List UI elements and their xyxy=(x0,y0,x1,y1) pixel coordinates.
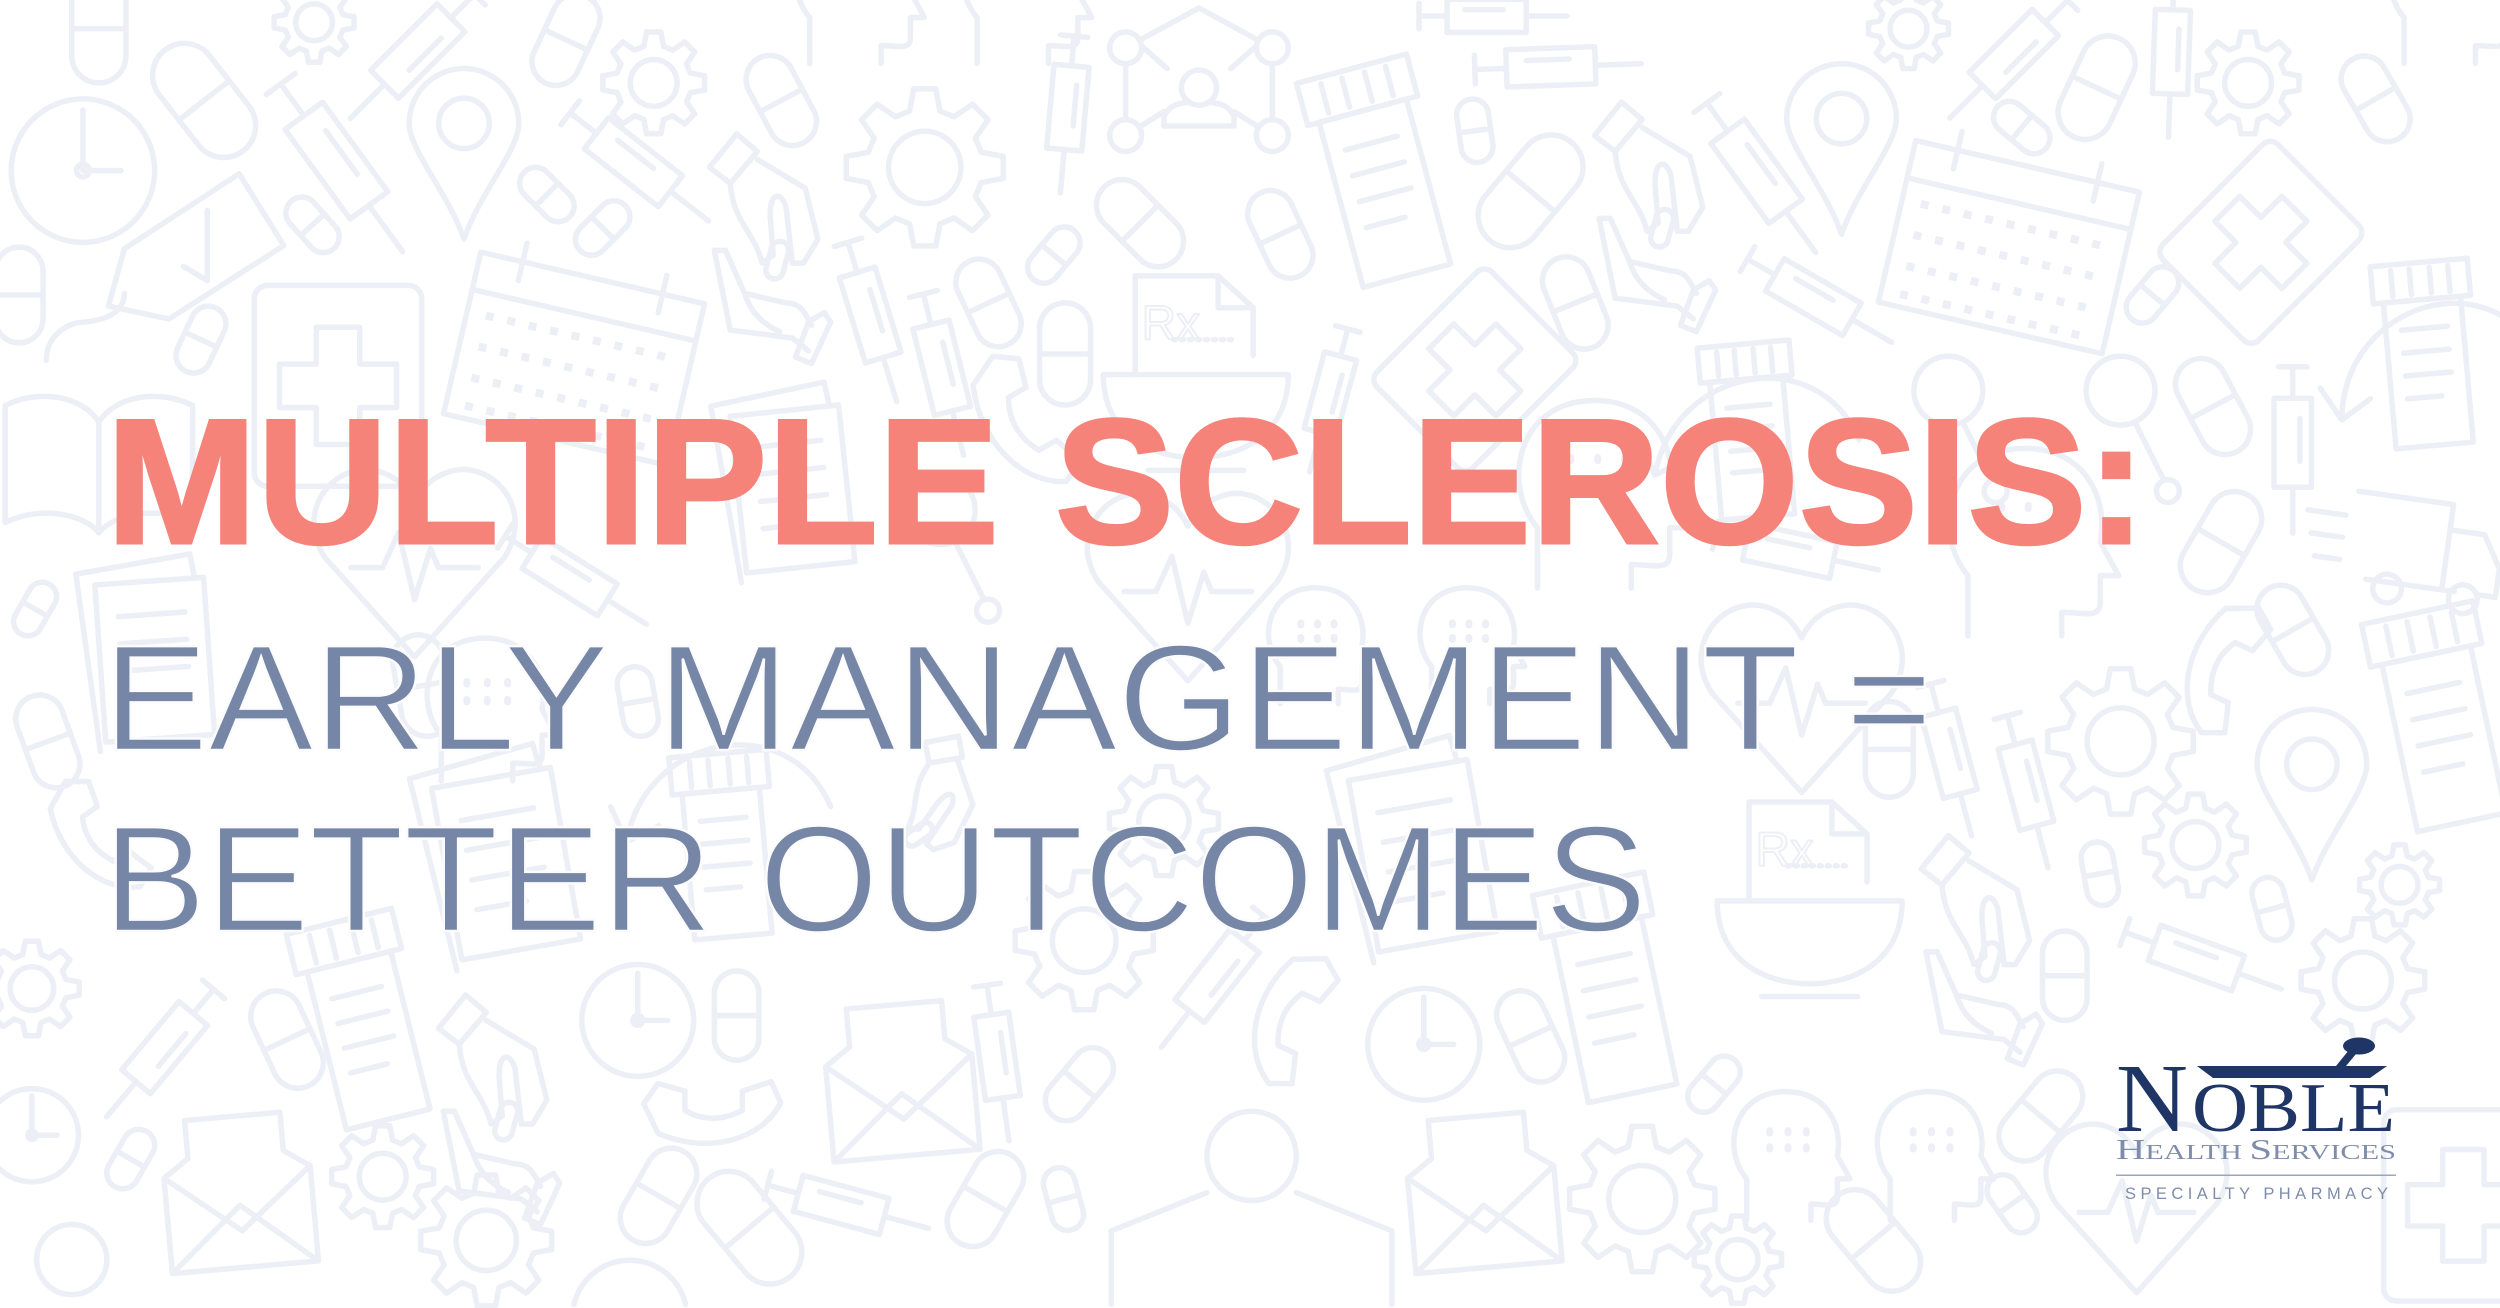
subtitle: Early Management = Better Outcomes: = xyxy=(1846,613,1932,782)
title: Multiple Sclerosis xyxy=(106,382,2146,581)
title: Multiple Sclerosis: MULTIPLE xyxy=(106,382,999,581)
bottom band xyxy=(0,941,79,1036)
title: Multiple Sclerosis: SCLEROSIS: xyxy=(1055,382,2146,581)
logo icon: mortar pestle xyxy=(2197,1038,2387,1078)
logo rule xyxy=(2116,1174,2396,1176)
logo wordmark: Noble: OBLE xyxy=(2192,1070,2395,1147)
subtitle: Early Management = Better Outcomes: MANAGEMENT xyxy=(657,613,1799,782)
subtitle: Early Management = Better Outcomes: EARLY xyxy=(103,613,609,782)
logo wordmark: Noble: N xyxy=(2116,1045,2188,1153)
logo wordmark: Noble xyxy=(2116,1045,2395,1153)
third band xyxy=(5,396,193,533)
subtitle: Early Management = Better Outcomes: OUTCOMES xyxy=(759,794,1647,963)
second band xyxy=(46,174,284,360)
logo line: Specialty Pharmacy: SPECIALTY PHARMACY xyxy=(2125,1185,2388,1203)
subtitle: Early Management = Better Outcomes: BETTER xyxy=(103,794,713,963)
fourth band xyxy=(611,745,831,842)
subtitle: Early Management = Better Outcomes xyxy=(103,613,1932,963)
logo line: Health Services: H EALTH S ERVICES xyxy=(2116,1135,2396,1166)
top band xyxy=(72,0,126,83)
